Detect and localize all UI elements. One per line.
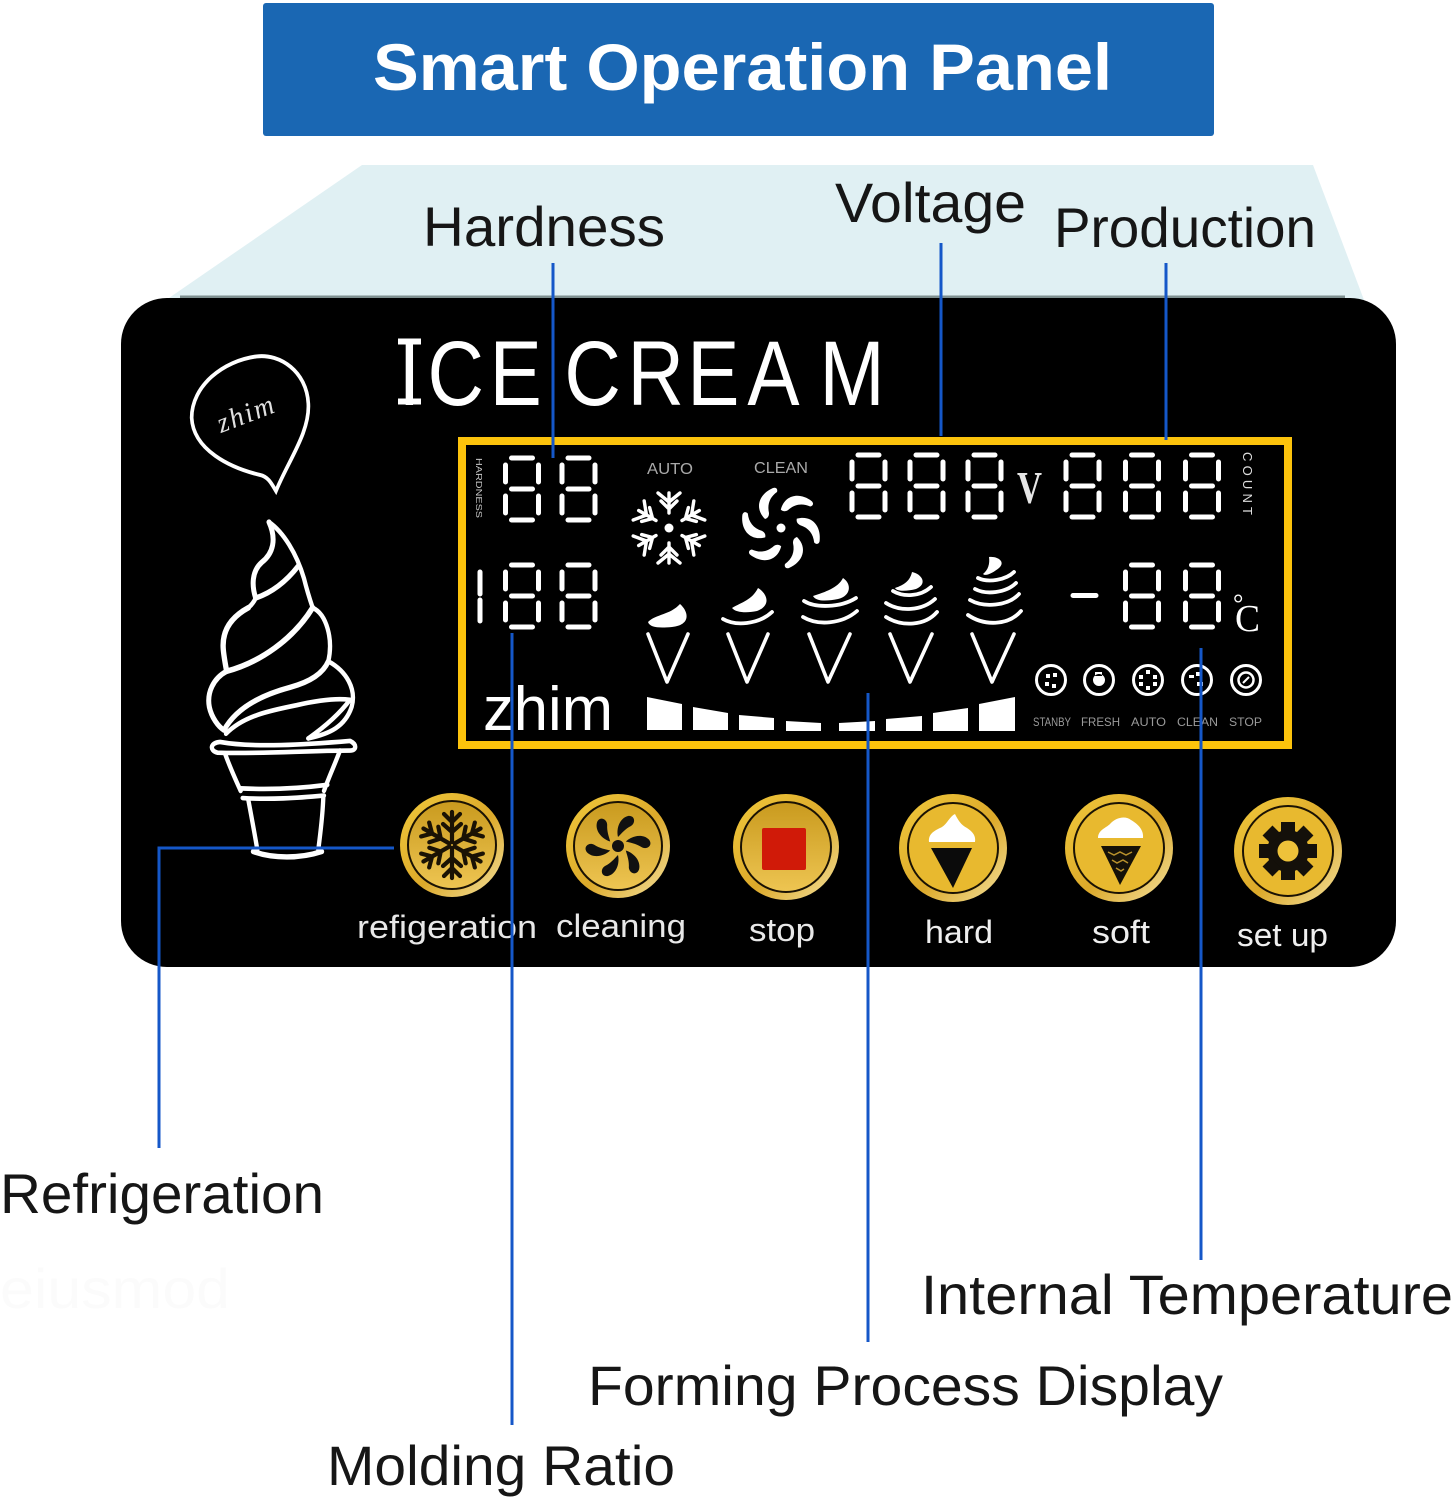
status labels row: CLEAN xyxy=(1177,715,1218,729)
button: refrigeration: refigeration xyxy=(357,909,537,945)
button: refrigeration xyxy=(357,793,537,945)
LCD display frame xyxy=(462,441,1288,745)
button: set up: set up xyxy=(1237,917,1328,953)
icon: ice cream cone outline xyxy=(209,522,355,857)
button: hard xyxy=(899,794,1007,950)
status labels row: STOP xyxy=(1229,715,1262,729)
button: set up xyxy=(1234,797,1342,953)
callout leader lines xyxy=(159,243,1201,1425)
label: Production: Production xyxy=(1054,196,1316,259)
icon: zhim speech bubble xyxy=(192,356,308,491)
internal temperature readout: C xyxy=(1235,598,1260,640)
production count readout xyxy=(1066,452,1255,517)
button: cleaning xyxy=(556,794,686,944)
button: stop: stop xyxy=(749,912,815,948)
label: Internal Temperature: Internal Temperature xyxy=(921,1263,1453,1326)
button: cleaning: cleaning xyxy=(556,908,686,944)
forming process display: five cones xyxy=(648,557,1021,682)
icon: LCD snowflake xyxy=(633,493,705,563)
voltage readout: V xyxy=(1017,462,1042,513)
status labels row: AUTO xyxy=(1131,715,1166,729)
button: soft xyxy=(1065,794,1173,950)
title banner xyxy=(263,3,1214,136)
faint watermark text: eiusmod xyxy=(0,1257,230,1320)
label: Hardness: Hardness xyxy=(423,195,665,258)
icon: LCD fan xyxy=(735,488,827,568)
molding ratio readout xyxy=(480,565,595,627)
status labels row xyxy=(1033,715,1262,729)
panel: black control panel xyxy=(121,298,1396,967)
label: Molding Ratio: Molding Ratio xyxy=(327,1434,675,1497)
status labels row: STANBY xyxy=(1033,715,1071,729)
forming process progress bars xyxy=(647,697,1015,731)
title banner: Smart Operation Panel xyxy=(373,30,1112,104)
label: Voltage: Voltage xyxy=(835,171,1026,234)
internal temperature readout xyxy=(1073,565,1260,640)
button: soft: soft xyxy=(1092,914,1150,950)
button: hard: hard xyxy=(925,914,993,950)
hardness readout: HARDNESS xyxy=(474,458,484,518)
internal temperature readout: ° xyxy=(1233,589,1243,618)
production count readout: COUNT xyxy=(1240,452,1255,515)
LCD brand zhim: zhim xyxy=(483,675,613,744)
hardness readout xyxy=(474,458,595,520)
label: Refrigeration: Refrigeration xyxy=(0,1162,324,1225)
button: stop xyxy=(733,794,839,948)
label: Forming Process Display: Forming Process Display xyxy=(588,1354,1223,1417)
status labels row: FRESH xyxy=(1081,715,1120,729)
heading: ICE CREAM: ICE CREAM xyxy=(398,323,885,425)
voltage readout xyxy=(852,455,1042,517)
light teal perspective backdrop xyxy=(166,165,1364,300)
icon: zhim speech bubble: zhim xyxy=(211,389,280,440)
CLEAN label: CLEAN xyxy=(754,460,808,477)
status icons row xyxy=(1036,666,1260,694)
AUTO label: AUTO xyxy=(647,461,693,478)
